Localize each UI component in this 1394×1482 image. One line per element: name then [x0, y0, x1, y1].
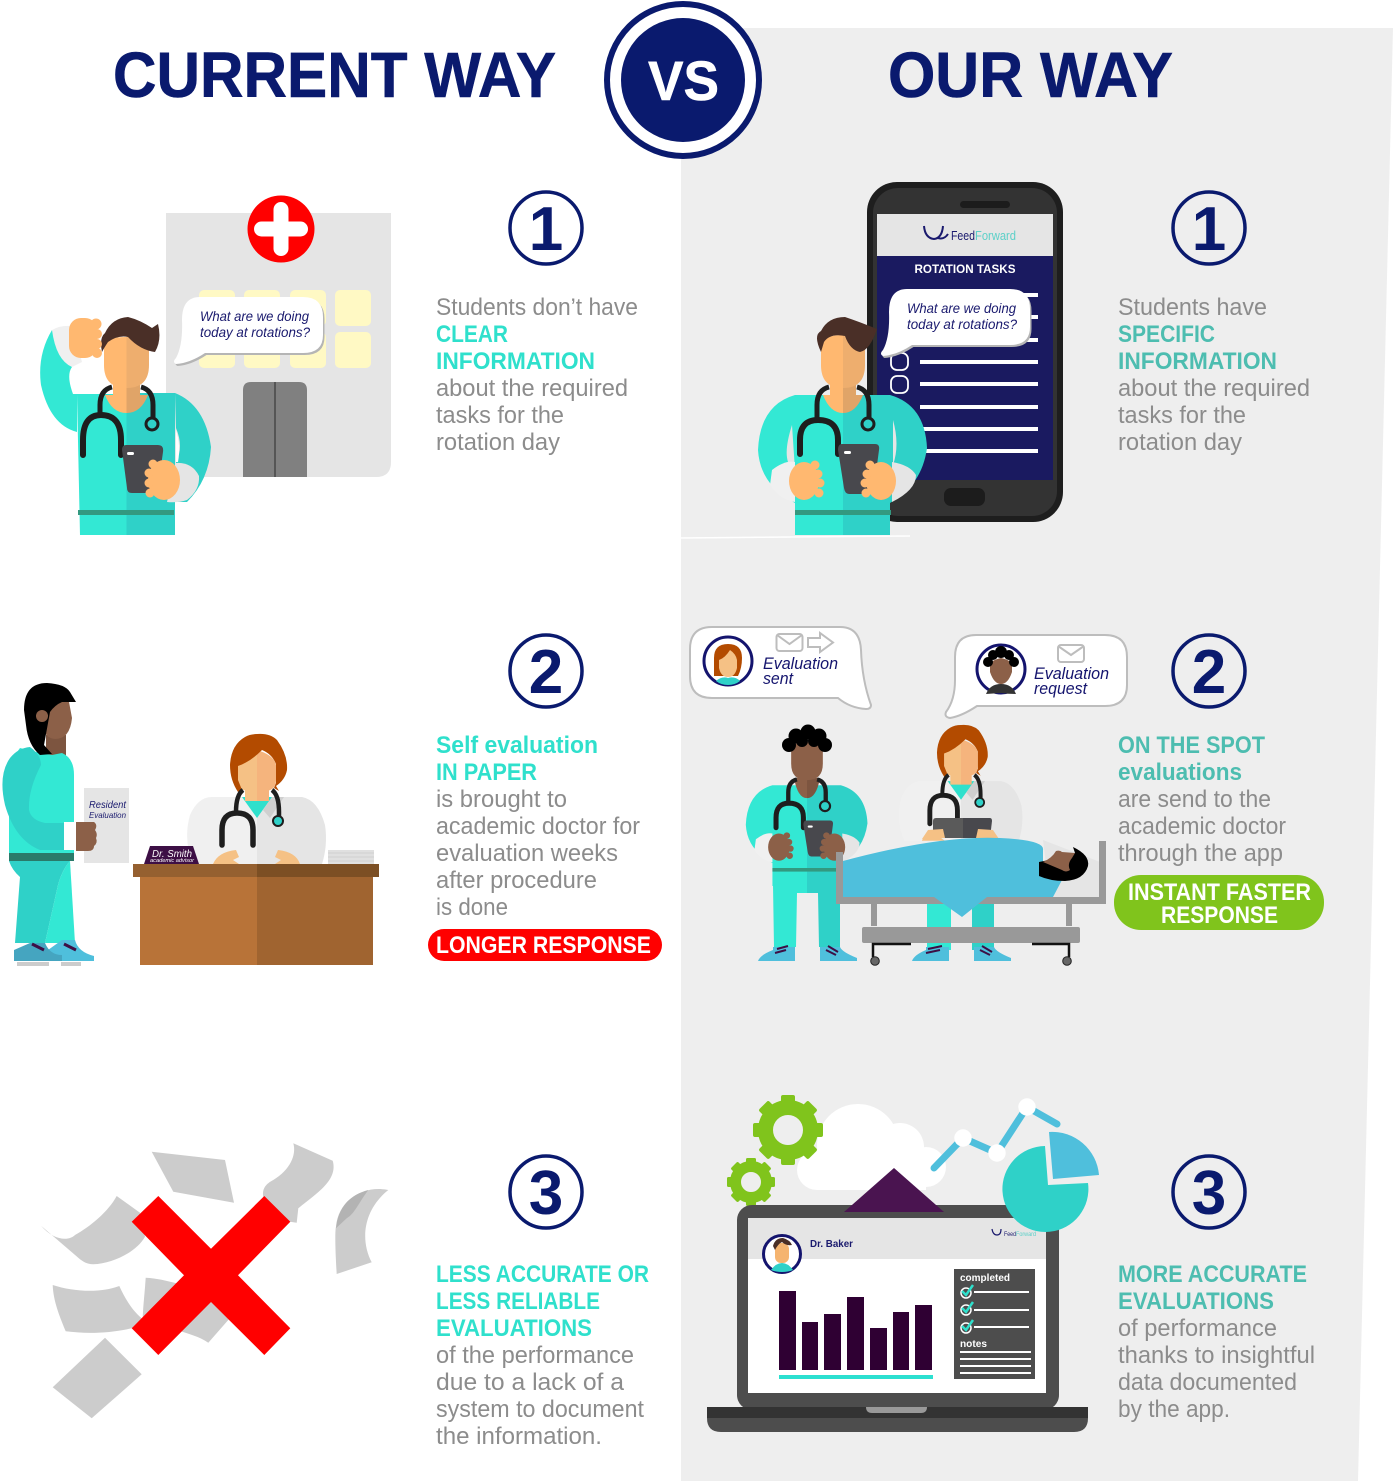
text block: our way step 1: about the required	[1118, 375, 1310, 402]
speech bubble: our way: today at rotations?	[907, 316, 1017, 332]
badge: VS	[607, 4, 759, 156]
callout: instant faster response: INSTANT FASTER	[1128, 879, 1311, 906]
illustration: hospital with confused doctor	[40, 196, 391, 535]
text block: our way step 3: thanks to insightful	[1118, 1342, 1315, 1369]
text block: our way step 1: Students have	[1118, 294, 1267, 321]
badge: VS: VS	[648, 49, 719, 112]
text block: our way step 2: academic doctor	[1118, 813, 1286, 840]
step number 2 left: 2	[529, 638, 563, 707]
step number 3 left	[510, 1156, 582, 1228]
nameplate: Dr. Smith: academic advisor	[150, 858, 194, 864]
smartphone	[867, 182, 1063, 522]
callout: longer response: LONGER RESPONSE	[436, 932, 651, 959]
hand on phone	[144, 460, 180, 500]
hands	[789, 460, 896, 500]
logo: FeedForward small	[992, 1229, 1036, 1238]
icon: cloud	[797, 1104, 946, 1190]
panel: completed and notes: notes	[960, 1338, 987, 1350]
text block: current way step 1: INFORMATION	[436, 348, 595, 375]
text block: current way step 2: evaluation weeks	[436, 840, 618, 867]
icon: red cross	[248, 196, 314, 262]
evaluation request bubble: Evaluation	[1034, 664, 1109, 683]
logo: FeedForward: Forward	[975, 228, 1016, 243]
evaluation sent bubble: sent	[763, 669, 794, 688]
text block: current way step 3: LESS RELIABLE	[436, 1288, 600, 1315]
pie chart icon	[1002, 1132, 1099, 1232]
illustration: laptop dashboard with cloud and charts	[707, 1095, 1099, 1432]
student with evaluation paper: Resident	[89, 799, 127, 811]
heading: current way: CURRENT WAY	[113, 39, 556, 111]
hospital building	[166, 213, 391, 477]
evaluation sent bubble: Evaluation	[763, 654, 838, 673]
text block: current way step 2: academic doctor for	[436, 813, 640, 840]
text block: our way step 3: of performance	[1118, 1315, 1277, 1342]
callout: instant faster response	[1114, 875, 1324, 930]
doctor with phone	[746, 724, 867, 961]
panel: our way background	[681, 28, 1393, 1481]
panel: completed and notes	[954, 1269, 1035, 1379]
text block: our way step 2	[1118, 732, 1286, 867]
logo: FeedForward small: Feed	[1004, 1231, 1016, 1238]
nameplate: Dr. Smith: Dr. Smith	[152, 849, 192, 860]
step number 2 right	[1173, 635, 1245, 707]
hospital bed with patient	[836, 838, 1106, 965]
step number 3 right: 3	[1192, 1159, 1226, 1228]
text block: current way step 3	[436, 1261, 649, 1450]
step number 1 right	[1173, 192, 1245, 264]
panel: completed and notes: completed	[960, 1272, 1010, 1284]
speech bubble: our way: What are we doing	[907, 300, 1016, 316]
text block: our way step 2: are send to the	[1118, 786, 1271, 813]
text block: current way step 2: is brought to	[436, 786, 567, 813]
evaluation request bubble	[946, 635, 1127, 718]
logo: FeedForward: Feed	[951, 228, 975, 243]
doctor with tablet	[899, 725, 1022, 961]
text block: current way step 1: CLEAR	[436, 321, 508, 348]
text block: current way step 2: is done	[436, 894, 508, 921]
illustration: phone app with doctor	[758, 182, 1063, 535]
step number 2 left	[510, 635, 582, 707]
desk	[133, 864, 379, 965]
text block: current way step 3: LESS ACCURATE OR	[436, 1261, 649, 1288]
text block: our way step 3: by the app.	[1118, 1396, 1230, 1423]
text block: current way step 2: IN PAPER	[436, 759, 537, 786]
logo: FeedForward	[924, 226, 1016, 243]
icon: gears	[727, 1095, 823, 1206]
student with evaluation paper	[2, 683, 129, 966]
doctor with hand on forehead	[40, 317, 211, 535]
text block: current way step 1	[436, 294, 638, 456]
step number 1 right: 1	[1192, 195, 1226, 264]
speech bubble: our way	[881, 289, 1032, 358]
line chart icon	[934, 1098, 1057, 1168]
evaluation request bubble: request	[1034, 679, 1088, 698]
text block: current way step 1: about the required	[436, 375, 628, 402]
speech bubble: current way: What are we doing	[200, 308, 309, 324]
text block: our way step 2: evaluations	[1118, 759, 1242, 786]
step number 1 left	[510, 192, 582, 264]
raised hand	[69, 318, 102, 358]
paper stack	[328, 850, 374, 864]
text block: our way step 1	[1118, 294, 1310, 456]
speech bubble: current way	[174, 297, 324, 366]
text block: our way step 2: ON THE SPOT	[1118, 732, 1265, 759]
text block: our way step 3: data documented	[1118, 1369, 1297, 1396]
laptop	[707, 1205, 1088, 1432]
text block: current way step 3: system to document	[436, 1396, 644, 1423]
text block: current way step 2: Self evaluation	[436, 732, 598, 759]
logo: FeedForward small: Forward	[1016, 1231, 1036, 1238]
text block: current way step 3: EVALUATIONS	[436, 1315, 592, 1342]
evaluation sent bubble	[690, 627, 871, 709]
heading: our way: OUR WAY	[888, 39, 1173, 111]
text block: current way step 1: rotation day	[436, 429, 560, 456]
profile: Dr. Baker	[764, 1236, 853, 1272]
text block: our way step 1: SPECIFIC	[1118, 321, 1215, 348]
text block: our way step 1: tasks for the	[1118, 402, 1246, 429]
text block: current way step 3: the information.	[436, 1423, 602, 1450]
icon: red X	[132, 1196, 290, 1355]
text block: current way step 3: of the performance	[436, 1342, 634, 1369]
step number 2 right: 2	[1192, 638, 1226, 707]
triangle icon	[844, 1168, 944, 1212]
text block: current way step 1: tasks for the	[436, 402, 564, 429]
profile: Dr. Baker: Dr. Baker	[810, 1238, 853, 1250]
advisor doctor	[187, 734, 326, 864]
text block: current way step 1: Students don’t have	[436, 294, 638, 321]
text block: current way step 2	[436, 732, 640, 921]
doctor holding phone	[758, 317, 927, 535]
speech bubble: current way: today at rotations?	[200, 324, 310, 340]
step number 3 right	[1173, 1156, 1245, 1228]
step number 3 left: 3	[529, 1159, 563, 1228]
smartphone: ROTATION TASKS	[914, 264, 1016, 276]
illustration: doctors at patient bedside	[690, 627, 1127, 965]
text block: our way step 3	[1118, 1261, 1315, 1423]
nameplate: Dr. Smith	[144, 846, 199, 864]
text block: our way step 2: through the app	[1118, 840, 1283, 867]
text block: our way step 1: INFORMATION	[1118, 348, 1277, 375]
bar chart	[779, 1291, 933, 1379]
text block: our way step 3: MORE ACCURATE	[1118, 1261, 1307, 1288]
illustration: scattered papers crossed out	[41, 1143, 388, 1418]
scattered papers	[41, 1143, 388, 1418]
illustration: student bringing paper to advisor	[2, 683, 379, 966]
text block: current way step 3: due to a lack of a	[436, 1369, 625, 1396]
student with evaluation paper: Evaluation	[89, 810, 126, 820]
text block: our way step 1: rotation day	[1118, 429, 1242, 456]
text block: current way step 2: after procedure	[436, 867, 597, 894]
step number 1 left: 1	[529, 195, 563, 264]
callout: instant faster response: RESPONSE	[1161, 902, 1278, 929]
text block: our way step 3: EVALUATIONS	[1118, 1288, 1274, 1315]
